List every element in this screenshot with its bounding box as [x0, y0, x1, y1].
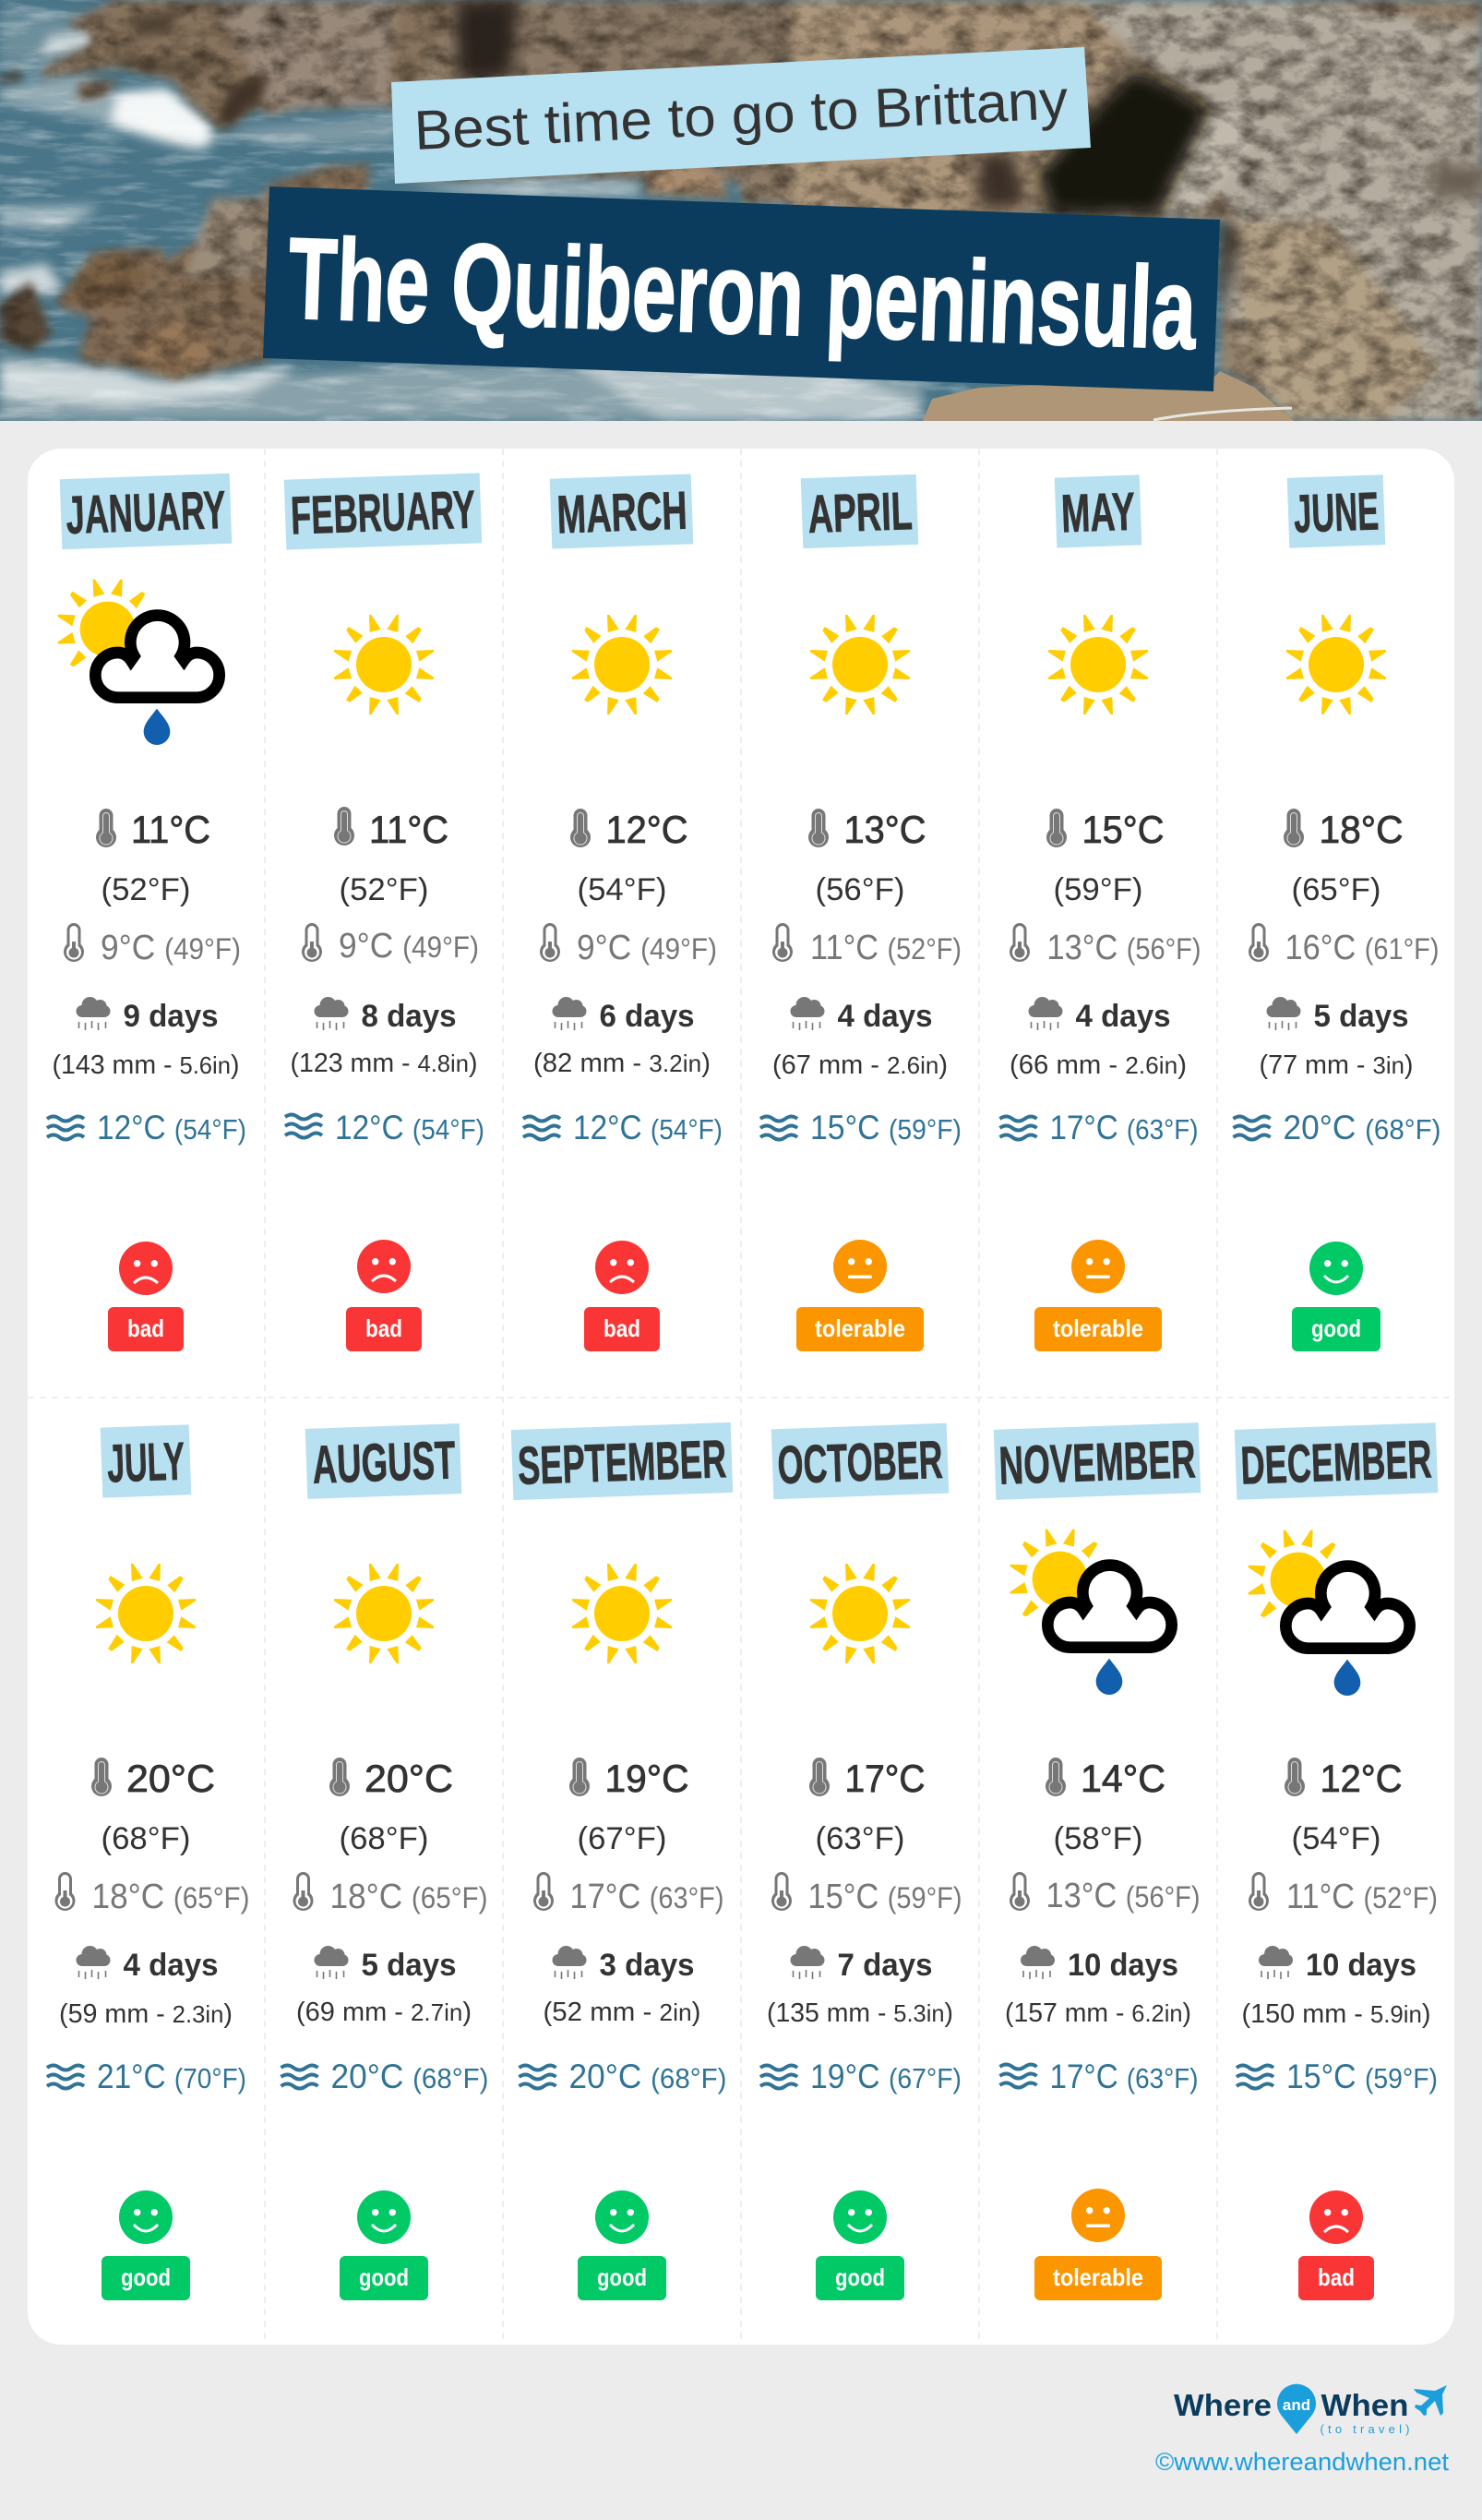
average low temperature	[55, 1872, 249, 1916]
precipitation: (135 mm - 5.3in)	[767, 1998, 953, 2028]
average high temperature: 18°C	[1320, 808, 1403, 851]
high temperature in Fahrenheit: (59°F)	[1053, 872, 1143, 907]
hero photo: rocky coast	[0, 0, 1482, 421]
icon: map pin: and	[1283, 2396, 1310, 2414]
average high temperature	[1284, 808, 1403, 851]
icon: sun	[334, 615, 434, 714]
average low temperature: 18°C (65°F)	[330, 1878, 487, 1916]
precipitation: (66 mm - 2.6in)	[1010, 1050, 1187, 1080]
rating: good: good	[359, 2263, 409, 2291]
icon: sun with cloud and rain	[58, 580, 220, 745]
title ribbon: subtitle	[391, 47, 1091, 184]
high temperature in Fahrenheit: (54°F)	[577, 872, 667, 907]
precipitation: (82 mm - 3.2in)	[533, 1049, 711, 1078]
rating: good	[578, 2190, 666, 2300]
average low temperature: 13°C (56°F)	[1046, 929, 1201, 967]
column: February	[284, 473, 484, 1351]
rating: bad: bad	[604, 1314, 640, 1342]
rating: bad	[108, 1242, 184, 1351]
high temperature in Fahrenheit: (58°F)	[1053, 1821, 1143, 1856]
rainy days	[1021, 1946, 1178, 1983]
rocks	[0, 0, 1482, 421]
month tag: October	[771, 1423, 949, 1499]
average high temperature: 20°C	[126, 1757, 215, 1800]
rainy days: 3 days	[600, 1948, 694, 1983]
month tag: February	[284, 473, 482, 550]
precipitation: (143 mm - 5.6in)	[52, 1050, 240, 1080]
average low temperature	[1010, 923, 1201, 967]
average high temperature: 19°C	[605, 1757, 688, 1800]
column: August	[281, 1423, 489, 2300]
high temperature in Fahrenheit: (52°F)	[339, 872, 429, 907]
rainy days	[552, 997, 694, 1034]
average high temperature	[808, 808, 926, 851]
precipitation: (69 mm - 2.7in)	[296, 1998, 472, 2027]
month tag: August	[305, 1423, 461, 1499]
month tag: May	[1055, 474, 1141, 548]
rainy days	[790, 1946, 932, 1983]
column: May	[1000, 474, 1201, 1351]
icon: sun	[810, 615, 910, 714]
average low temperature: 18°C (65°F)	[92, 1878, 249, 1916]
column: March	[523, 474, 723, 1351]
average low temperature: 9°C (49°F)	[101, 929, 241, 967]
sea temperature: 20°C (68°F)	[330, 2058, 489, 2095]
rainy days	[314, 1946, 456, 1983]
column: April	[760, 474, 962, 1351]
average high temperature	[1046, 1757, 1165, 1800]
average low temperature: 15°C (59°F)	[808, 1878, 962, 1916]
column: July	[47, 1424, 249, 2300]
month tag: January: JANUARY	[65, 480, 227, 546]
column: November	[994, 1422, 1201, 2300]
rainy days	[1266, 997, 1408, 1034]
average high temperature: 12°C	[1320, 1757, 1403, 1800]
icon: sun	[96, 1564, 196, 1663]
month tag: April	[801, 474, 918, 548]
icon: sun	[572, 615, 672, 714]
high temperature in Fahrenheit: (68°F)	[339, 1821, 429, 1856]
rating: good	[102, 2190, 190, 2300]
icon: sun	[334, 1564, 434, 1663]
average low temperature: 16°C (61°F)	[1285, 929, 1440, 967]
column: January	[47, 474, 246, 1351]
rating: bad: bad	[365, 1314, 402, 1342]
column: December	[1235, 1422, 1438, 2300]
rainy days: 6 days	[600, 999, 694, 1034]
precipitation: (150 mm - 5.9in)	[1242, 1999, 1431, 2029]
main panel	[28, 449, 1454, 2345]
average low temperature	[1249, 1872, 1438, 1916]
logo: Where and When: (to travel)	[1320, 2422, 1410, 2436]
average low temperature: 9°C (49°F)	[577, 929, 717, 967]
high temperature in Fahrenheit: (65°F)	[1291, 872, 1381, 907]
average high temperature: 12°C	[605, 808, 688, 851]
precipitation: (52 mm - 2in)	[543, 1998, 701, 2027]
precipitation: (59 mm - 2.3in)	[59, 1999, 233, 2029]
icon: sun with cloud and rain	[1010, 1530, 1172, 1695]
average high temperature: 15°C	[1082, 808, 1165, 851]
precipitation: (77 mm - 3in)	[1259, 1050, 1414, 1080]
average high temperature: 20°C	[365, 1757, 453, 1800]
month tag: November	[994, 1422, 1201, 1500]
rating: bad: bad	[127, 1314, 164, 1342]
average low temperature	[533, 1872, 723, 1916]
month tag: April: APRIL	[807, 481, 914, 545]
high temperature in Fahrenheit: (63°F)	[815, 1821, 905, 1856]
logo: Where and When	[1174, 2384, 1447, 2436]
average high temperature: 14°C	[1081, 1757, 1165, 1800]
average low temperature	[771, 1872, 962, 1916]
rainy days: 10 days	[1306, 1948, 1416, 1983]
average low temperature	[540, 923, 717, 967]
average high temperature	[809, 1757, 925, 1800]
rating: bad	[1298, 2190, 1374, 2300]
rating: bad	[584, 1241, 660, 1351]
high temperature in Fahrenheit: (56°F)	[815, 872, 905, 907]
month tag: May: MAY	[1060, 482, 1136, 544]
rainy days	[76, 1946, 218, 1983]
rainy days: 9 days	[124, 999, 218, 1034]
dark crevices	[111, 11, 268, 129]
average high temperature: 17°C	[845, 1757, 925, 1800]
average low temperature	[1010, 1872, 1200, 1915]
rating: good	[1292, 1242, 1380, 1351]
icon: sun with cloud and rain	[1249, 1530, 1410, 1696]
rating: good: good	[597, 2263, 647, 2291]
title ribbon: subtitle: Best time to go to Brittany	[412, 68, 1070, 162]
rating: tolerable: tolerable	[1053, 2263, 1143, 2291]
month tag: March: MARCH	[556, 481, 688, 545]
sea temperature: 12°C (54°F)	[335, 1109, 484, 1146]
rainy days: 4 days	[838, 999, 932, 1034]
rating: tolerable	[796, 1240, 924, 1351]
month tag: January	[60, 474, 232, 549]
rainy days: 4 days	[124, 1948, 218, 1983]
column: June	[1233, 474, 1441, 1351]
sea temperature: 12°C (54°F)	[573, 1109, 723, 1146]
sea temperature: 21°C (70°F)	[97, 2058, 246, 2095]
icon: sun	[1286, 615, 1386, 714]
icon: sun	[1048, 615, 1148, 714]
rainy days: 8 days	[362, 999, 456, 1034]
rating: bad	[346, 1240, 422, 1351]
month tag: July	[101, 1424, 191, 1498]
sea temperature: 17°C (63°F)	[1050, 2058, 1198, 2095]
average low temperature: 17°C (63°F)	[570, 1878, 724, 1916]
rainy days	[552, 1946, 694, 1983]
icon: sun	[572, 1564, 672, 1663]
month tag: June	[1287, 474, 1385, 548]
average high temperature	[569, 1757, 688, 1800]
month tag: June: JUNE	[1293, 481, 1380, 545]
average high temperature: 11°C	[131, 808, 210, 851]
average high temperature	[96, 808, 210, 851]
high temperature in Fahrenheit: (54°F)	[1291, 1821, 1381, 1856]
sea temperature: 19°C (67°F)	[810, 2058, 962, 2095]
rating: tolerable	[1034, 1240, 1162, 1351]
logo: Where and When: Where	[1174, 2388, 1272, 2422]
average low temperature	[293, 1872, 487, 1916]
average low temperature	[1249, 923, 1440, 967]
rainy days	[1259, 1946, 1416, 1983]
rainy days	[790, 997, 932, 1034]
sea temperature: 12°C (54°F)	[97, 1109, 246, 1146]
sea temperature: 20°C (68°F)	[568, 2058, 727, 2095]
month tag: July: JULY	[106, 1432, 185, 1494]
rainy days: 7 days	[838, 1948, 932, 1983]
icon: map pin	[1277, 2384, 1316, 2434]
average high temperature: 13°C	[843, 808, 926, 851]
rating: good	[816, 2190, 904, 2300]
average high temperature	[570, 808, 688, 851]
rating: good	[340, 2190, 428, 2300]
average high temperature	[1285, 1757, 1403, 1800]
rating: tolerable: tolerable	[1053, 1314, 1143, 1342]
sea	[0, 0, 1482, 421]
average high temperature: 11°C	[369, 808, 448, 851]
title ribbon: main title	[263, 186, 1220, 391]
rainy days: 10 days	[1068, 1948, 1178, 1983]
column: October	[760, 1423, 962, 2300]
precipitation: (123 mm - 4.8in)	[290, 1049, 478, 1078]
month tag: August: AUGUST	[311, 1430, 457, 1495]
average low temperature: 9°C (49°F)	[339, 927, 479, 966]
month tag: March	[550, 474, 693, 549]
month tag: September: SEPTEMBER	[517, 1429, 727, 1496]
sea temperature: 15°C (59°F)	[1286, 2058, 1438, 2095]
beach	[923, 371, 1294, 421]
high temperature in Fahrenheit: (52°F)	[101, 872, 191, 907]
month tag: October: OCTOBER	[776, 1430, 944, 1495]
month tag: November: NOVEMBER	[998, 1429, 1197, 1496]
rating: tolerable	[1034, 2189, 1162, 2300]
rainy days: 5 days	[362, 1948, 456, 1983]
sea temperature: 17°C (63°F)	[1050, 1109, 1198, 1146]
average low temperature: 13°C (56°F)	[1046, 1877, 1201, 1915]
sea temperature: 20°C (68°F)	[1283, 1109, 1441, 1146]
logo: Where and When: When	[1321, 2388, 1408, 2422]
average low temperature	[772, 923, 962, 967]
rating: good: good	[1311, 1314, 1361, 1342]
icon: sun	[810, 1564, 910, 1663]
average low temperature: 11°C (52°F)	[810, 929, 962, 967]
rainy days: 4 days	[1076, 999, 1170, 1034]
average high temperature	[1046, 808, 1165, 851]
high temperature in Fahrenheit: (68°F)	[101, 1821, 191, 1856]
average low temperature	[64, 923, 241, 967]
rating: tolerable: tolerable	[815, 1314, 905, 1342]
month tag: September	[511, 1422, 733, 1500]
icon: plane	[1414, 2385, 1447, 2416]
rainy days	[76, 997, 218, 1034]
high temperature in Fahrenheit: (67°F)	[577, 1821, 667, 1856]
copyright and website: ©www.whereandwhen.net	[1155, 2448, 1449, 2476]
average low temperature: 11°C (52°F)	[1286, 1878, 1438, 1916]
rating: bad: bad	[1318, 2263, 1355, 2291]
rainy days	[314, 997, 456, 1034]
precipitation: (157 mm - 6.2in)	[1005, 1998, 1191, 2028]
precipitation: (67 mm - 2.6in)	[772, 1050, 948, 1080]
rainy days: 5 days	[1314, 999, 1408, 1034]
rating: good: good	[121, 2263, 171, 2291]
average high temperature	[334, 807, 448, 851]
rating: good: good	[835, 2263, 885, 2291]
month tag: February: FEBRUARY	[290, 480, 476, 546]
rainy days	[1028, 997, 1170, 1034]
sea temperature: 15°C (59°F)	[810, 1109, 962, 1146]
column: September	[511, 1422, 733, 2300]
